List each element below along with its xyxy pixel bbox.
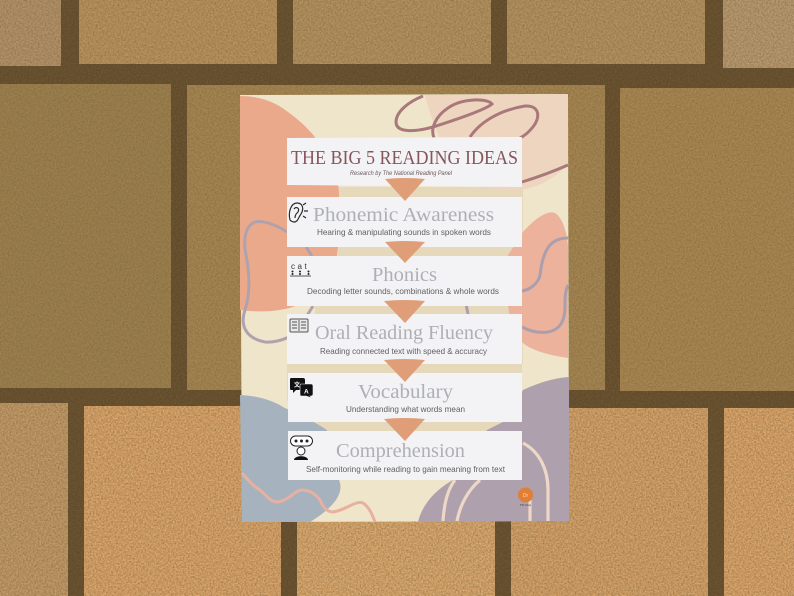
icon: cat letters with dots: cat — [291, 262, 309, 271]
icon: translation speech bubbles — [290, 378, 313, 398]
description: Hearing & manipulating sounds in spoken words — [317, 227, 491, 237]
decorative blob: tan centre — [287, 187, 523, 431]
heading: Comprehension — [336, 440, 465, 462]
panel: Phonics — [287, 256, 522, 306]
description: Decoding letter sounds, combinations & whole words — [307, 286, 499, 296]
panel: Vocabulary — [288, 373, 522, 422]
poster background — [240, 94, 569, 522]
decorative blob: purple bottom right — [418, 377, 569, 522]
description: Self-monitoring while reading to gain meaning from text — [306, 464, 506, 474]
arrow: Phonics to Oral Reading Fluency — [384, 300, 425, 323]
heading: Phonics — [372, 264, 437, 286]
icon: translation speech bubbles: 文 — [294, 381, 300, 389]
arrow: Oral Reading Fluency to Vocabulary — [384, 359, 425, 382]
heading: Oral Reading Fluency — [315, 322, 494, 344]
arrow: Phonemic Awareness to Phonics — [385, 241, 425, 263]
decorative line: lilac squiggle right — [466, 238, 568, 332]
decorative line: pale arches bottom right — [443, 443, 548, 521]
logo badge: TB Clips — [520, 503, 532, 507]
arrow: Vocabulary to Comprehension — [384, 418, 425, 441]
poster — [240, 94, 569, 522]
icon: translation speech bubbles: A — [304, 388, 309, 396]
subtitle: Research by The National Reading Panel — [350, 171, 453, 177]
decorative blob: blue bottom left — [240, 395, 341, 522]
panel: Phonemic Awareness — [287, 197, 522, 247]
decorative blob: peach left — [240, 96, 339, 311]
panel: title — [287, 137, 522, 187]
arrow: title to Phonemic Awareness — [385, 178, 425, 201]
icon: ear — [289, 203, 308, 222]
decorative line: mauve loops — [396, 96, 568, 182]
heading: Vocabulary — [358, 381, 454, 403]
title heading: THE BIG 5 READING IDEAS — [291, 147, 518, 169]
heading: Phonemic Awareness — [313, 204, 494, 226]
decorative blob: peach right — [505, 212, 568, 358]
icon: person thinking — [290, 436, 312, 460]
logo badge: Dr — [523, 493, 528, 499]
panel: Comprehension — [288, 431, 522, 480]
icon: open book — [290, 319, 308, 332]
description: Understanding what words mean — [346, 404, 465, 414]
logo badge — [518, 488, 533, 507]
decorative line: lilac squiggle left — [243, 221, 313, 342]
decorative blob: pale pink top right — [425, 94, 568, 191]
panel: Oral Reading Fluency — [287, 314, 522, 364]
icon: cat letters with dots — [290, 262, 311, 276]
description: Reading connected text with speed & accuracy — [320, 346, 488, 356]
decorative line: pink wave bottom left — [242, 473, 375, 522]
